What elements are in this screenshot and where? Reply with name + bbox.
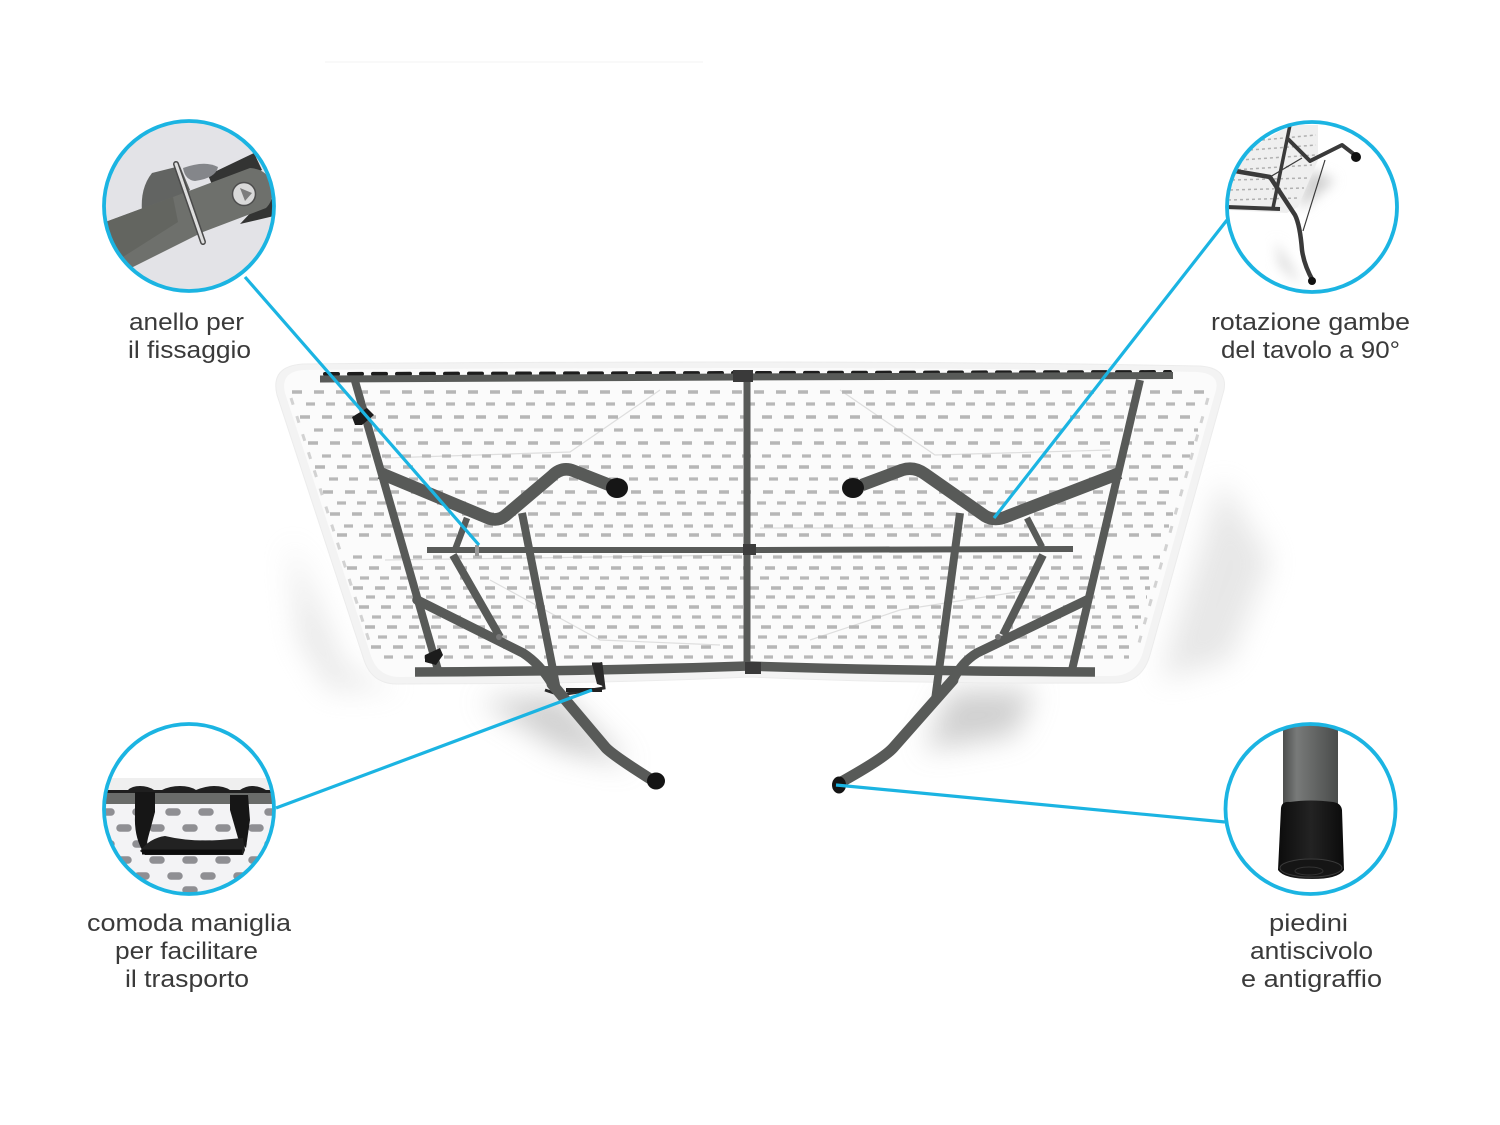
centre bar	[744, 375, 750, 668]
label: handle: comoda maniglia	[87, 910, 292, 937]
bottom bar	[415, 666, 1095, 672]
upper foot cap	[606, 478, 628, 498]
lower foot cap	[832, 776, 846, 794]
dome	[183, 164, 218, 181]
scalloped top edge	[325, 372, 1170, 374]
label: foot: e antigraffio	[1241, 966, 1382, 993]
carrying handle	[545, 662, 604, 695]
table inner field	[284, 368, 1217, 677]
dots	[103, 812, 280, 890]
connector line: rotation	[994, 220, 1227, 518]
detail circle: ring	[100, 118, 280, 298]
cross bar	[427, 549, 1073, 550]
table top	[276, 362, 1224, 684]
detail circle: rotation	[1225, 118, 1400, 298]
connector line: handle	[276, 690, 592, 808]
connector line: foot	[836, 785, 1225, 822]
bar	[100, 793, 280, 804]
tube	[1283, 722, 1338, 808]
label: foot	[1241, 910, 1382, 993]
faint line at top	[325, 61, 703, 63]
connector line: ring	[245, 277, 479, 545]
label: ring: il fissaggio	[128, 337, 251, 364]
label: foot: antiscivolo	[1250, 938, 1373, 965]
label: foot: piedini	[1269, 910, 1348, 937]
lower foot cap	[647, 772, 665, 790]
label: ring: anello per	[129, 309, 244, 336]
mini frame	[1226, 125, 1355, 281]
scallops	[108, 786, 270, 793]
strap	[100, 168, 273, 272]
left legs	[380, 469, 665, 790]
ground shadows	[290, 480, 1270, 690]
table surface	[276, 362, 1224, 684]
straps	[135, 792, 155, 850]
table frame	[320, 370, 1173, 674]
shadow	[1300, 170, 1335, 210]
top bar	[320, 376, 1173, 379]
leg shadows	[480, 690, 1035, 765]
upper foot cap	[842, 478, 864, 498]
grip	[140, 836, 245, 855]
rubber foot	[1278, 800, 1344, 879]
side rails	[355, 381, 438, 670]
right legs	[832, 469, 1120, 794]
detail circle: handle	[100, 720, 280, 902]
label: ring	[128, 309, 251, 364]
back lobe	[142, 166, 190, 208]
black clips	[352, 408, 374, 425]
fixing ring on table	[475, 545, 479, 556]
mini table	[1226, 125, 1318, 213]
perforation pattern	[291, 392, 1210, 657]
label: rotation	[1211, 309, 1410, 364]
moulded shapes	[385, 390, 1110, 645]
label: rotation: del tavolo a 90°	[1221, 337, 1400, 364]
label: handle	[87, 910, 292, 993]
rivet	[232, 182, 256, 206]
label: rotation: rotazione gambe	[1211, 309, 1410, 336]
detail circle: foot	[1222, 720, 1402, 900]
centre hinges	[733, 370, 753, 382]
ring	[176, 164, 203, 242]
back strip	[208, 153, 262, 183]
label: handle: per facilitare	[115, 938, 258, 965]
label: handle: il trasporto	[125, 966, 249, 993]
